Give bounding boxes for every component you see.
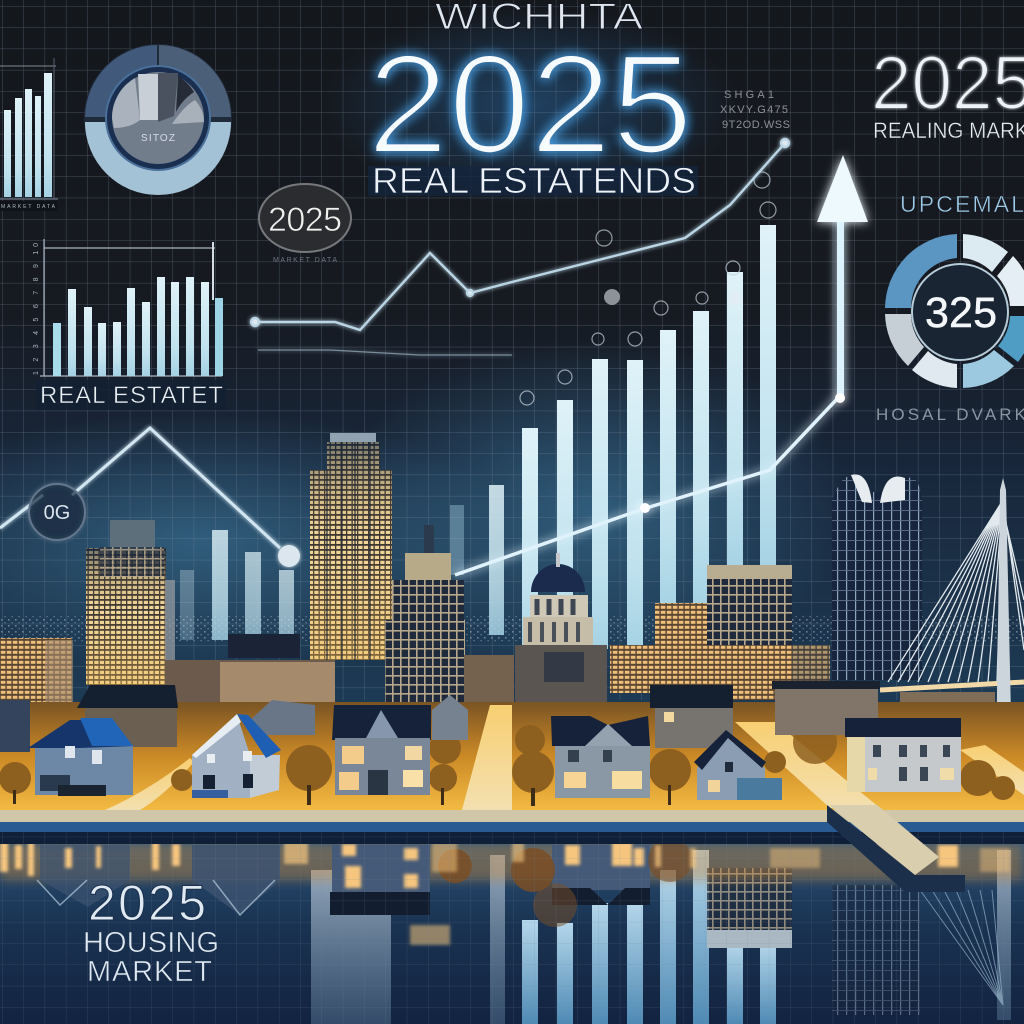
building: domed capitol bbox=[515, 553, 607, 707]
chart: real estate bar chart bbox=[33, 239, 223, 376]
small caption: top center bbox=[720, 89, 790, 131]
label: real estate: REAL ESTATET bbox=[40, 382, 223, 409]
title: year: 2025 bbox=[367, 25, 693, 184]
houses: back row bbox=[0, 681, 880, 752]
reflection: bars and towers bbox=[311, 850, 1011, 1024]
trees bbox=[0, 720, 1015, 806]
badge: 2025: MARKET DATA bbox=[273, 257, 337, 264]
icon: ring gauge top-left bbox=[84, 44, 232, 195]
title: subtitle: REAL ESTATENDS bbox=[372, 160, 696, 201]
icon: ring gauge top-left: SITOZ bbox=[141, 133, 175, 144]
label: 2025 housing market: HOUSING bbox=[83, 927, 219, 959]
small caption: top center: XKVY.G475 bbox=[720, 104, 788, 116]
line chart: upper trend bbox=[251, 139, 789, 355]
label: 2025 housing market: MARKET bbox=[87, 956, 212, 988]
reflection: amber lights bbox=[0, 842, 1010, 945]
house: dark roof center bbox=[332, 705, 431, 795]
label: 2025 housing market: 2025 bbox=[88, 875, 206, 931]
badge: 2025: 2025 bbox=[268, 201, 342, 239]
skyline: buildings bbox=[0, 433, 922, 720]
chart: donut gauge bbox=[885, 234, 1024, 388]
line chart: left trend bbox=[0, 428, 300, 567]
house: dark roof right bbox=[551, 716, 650, 798]
bridge: cable-stayed bbox=[880, 478, 1024, 760]
pier bbox=[827, 805, 965, 892]
small caption: top center: 9T2OD.WSS bbox=[722, 119, 790, 131]
house: blue roof center bbox=[192, 714, 281, 798]
arrow: growth arrow bbox=[455, 155, 868, 575]
house: blue roof left bbox=[28, 718, 133, 796]
label: upcoming: UPCEMAL bbox=[900, 191, 1024, 217]
scene: city skyline and houses bbox=[0, 433, 1024, 812]
chart: top-left bar chart: MARKET DATA bbox=[1, 204, 56, 210]
small caption: top center: SHGA1 bbox=[724, 89, 774, 101]
label: left trend marker: 0G bbox=[44, 502, 70, 524]
chart: real estate bar chart: 1 2 3 4 5 6 7 8 9 10 bbox=[33, 243, 40, 375]
ground: lit streets bbox=[0, 702, 1024, 812]
reflection: house silhouettes bbox=[0, 838, 1024, 927]
chart: main growth bars bbox=[180, 225, 776, 658]
badge: 2025 bbox=[259, 184, 351, 264]
label: 2025 housing market bbox=[83, 875, 219, 988]
chart: top-left bar chart bbox=[0, 58, 58, 211]
house: long right bbox=[845, 718, 961, 792]
icons: small markers above bars bbox=[520, 172, 776, 405]
house: small right bbox=[694, 730, 782, 800]
label: housing overview: HOSAL DVARK bbox=[876, 405, 1024, 424]
water: river with reflection bbox=[0, 810, 1024, 1024]
chart: donut gauge: 325 bbox=[925, 289, 997, 337]
